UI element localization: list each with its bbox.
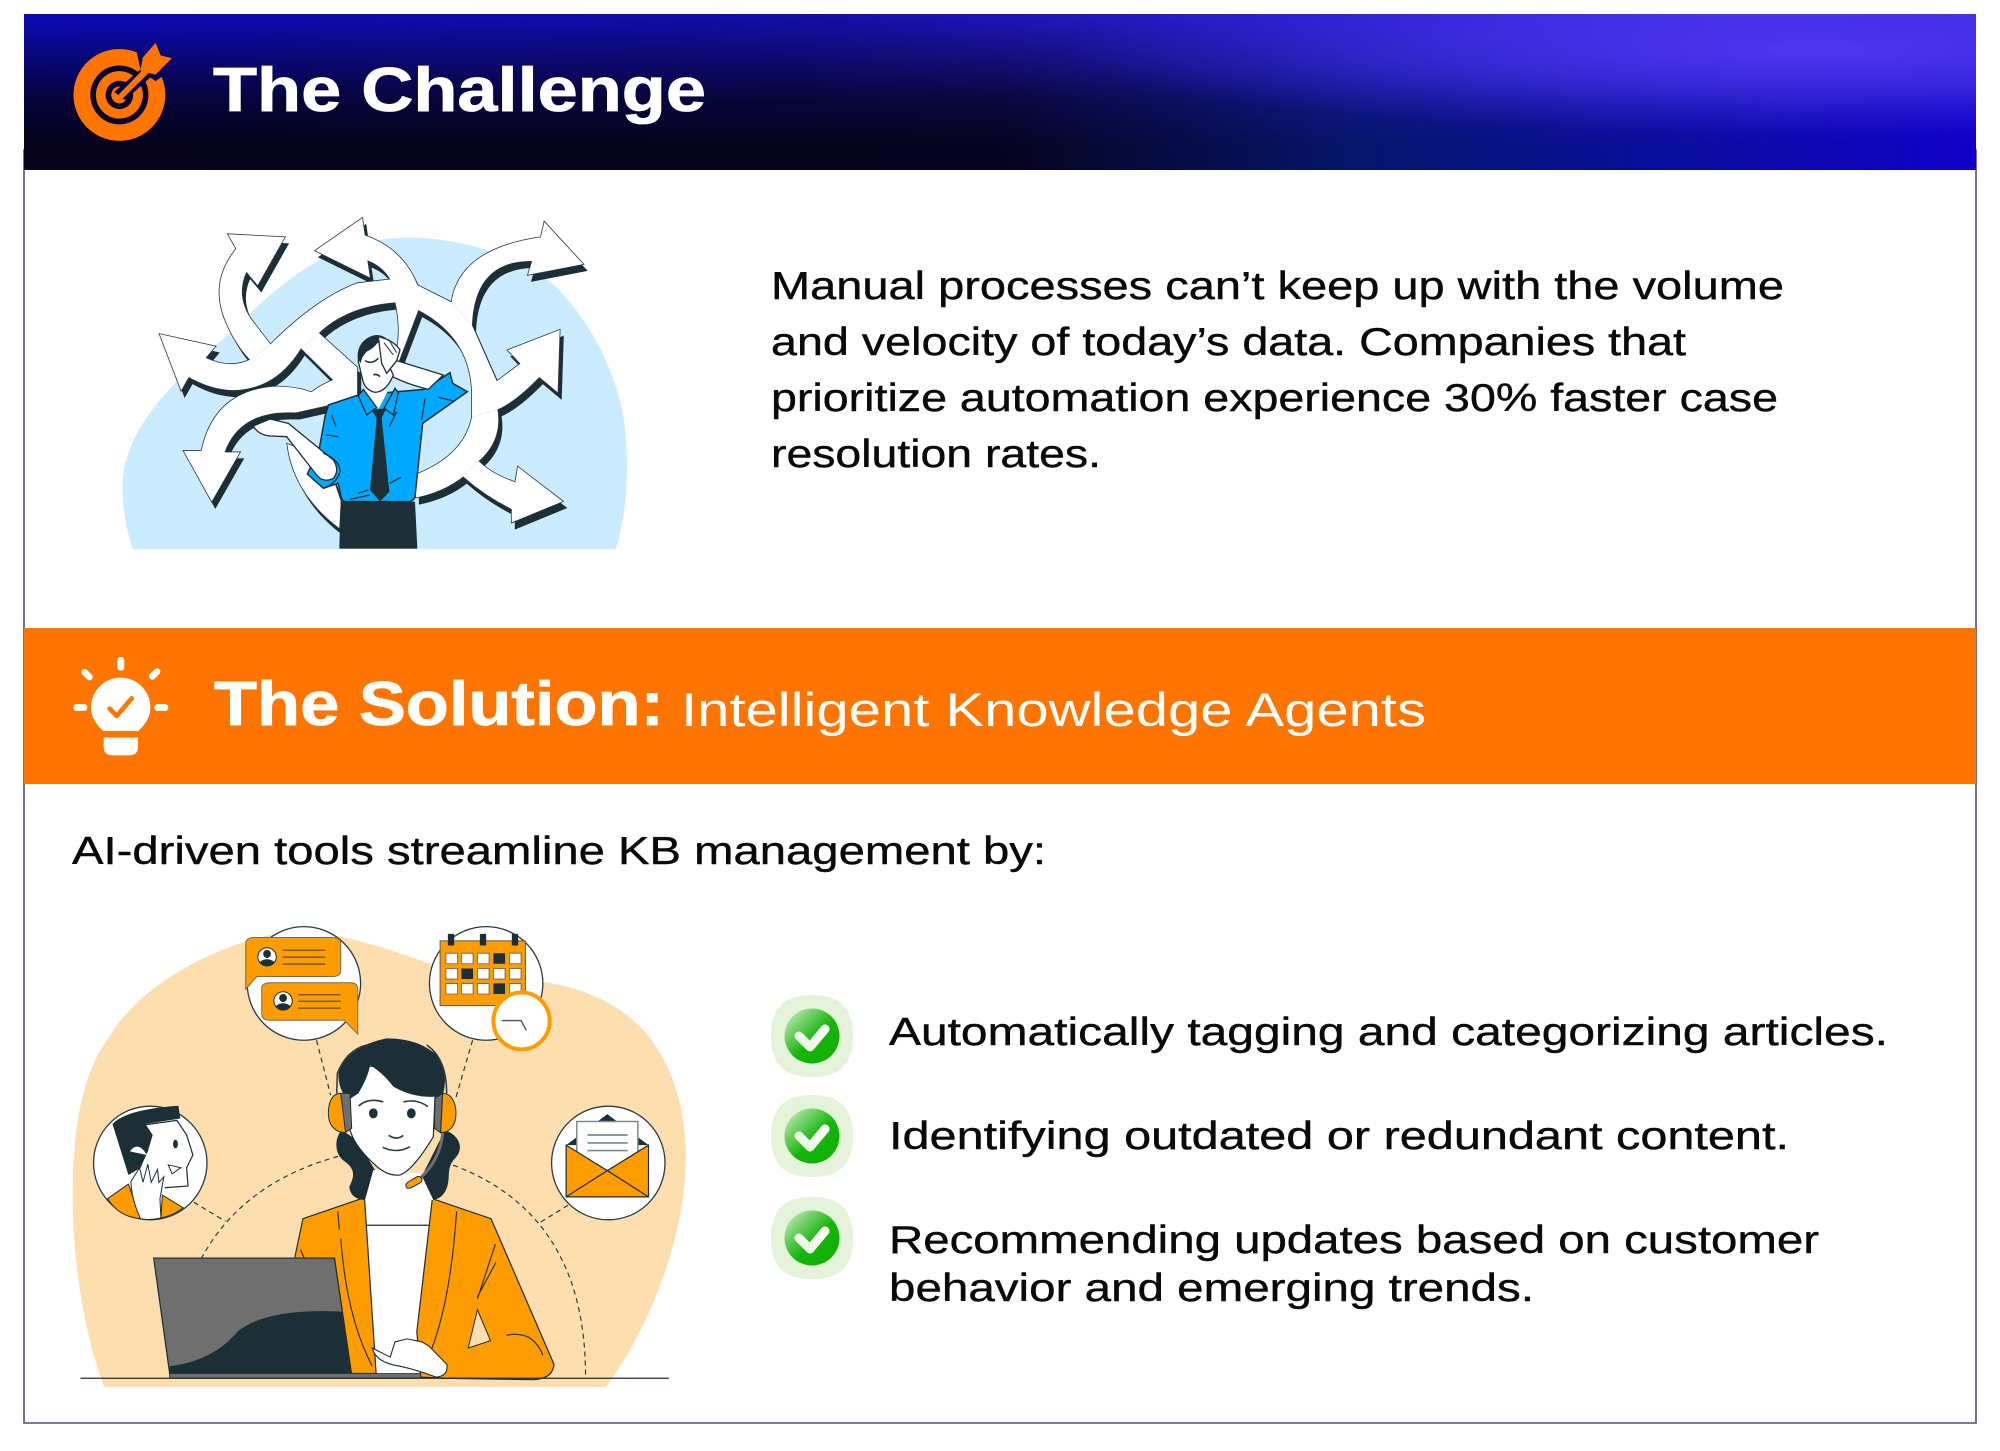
neck [365, 1170, 433, 1200]
neck [365, 388, 388, 408]
text block: challenge description: prioritize automation experience 30% faster case [771, 377, 1778, 420]
caller circle [94, 1106, 207, 1220]
list item 1 [771, 995, 1888, 1077]
hair [358, 335, 387, 363]
text block: challenge description: Manual processes can’t keep up with the volume [771, 265, 1784, 308]
icon: green check [771, 1095, 853, 1177]
left arm and hand [253, 419, 337, 480]
agent hands [372, 1339, 447, 1377]
ear cups [340, 1093, 443, 1133]
icon: green check [771, 1197, 853, 1279]
shirt creases [327, 397, 453, 499]
chat circle [246, 927, 361, 1040]
tie [370, 408, 389, 502]
peach blob [73, 929, 686, 1387]
brows, nose and smile [359, 1100, 428, 1151]
agent jacket and shirt [295, 1198, 554, 1380]
arrow shadow [163, 225, 587, 535]
face [350, 1063, 435, 1175]
headband [337, 1045, 447, 1093]
text: behavior and emerging trends. [889, 1267, 1534, 1310]
calendar circle [429, 927, 550, 1049]
envelope circle [552, 1106, 665, 1220]
face details [365, 358, 380, 377]
panel: solution header band [24, 628, 1976, 784]
light blue blob [122, 238, 627, 549]
man figure [253, 335, 467, 549]
text: Recommending updates based on customer [889, 1219, 1819, 1262]
text [889, 1219, 1819, 1310]
text block: challenge description: resolution rates. [771, 433, 1101, 476]
subheading: Intelligent Knowledge Agents: Intelligent Knowledge Agents [681, 683, 1426, 736]
microphone [420, 1133, 443, 1178]
heading: The Solution: The Solution: [214, 670, 664, 739]
title: The Challenge: The Challenge [213, 56, 706, 125]
laptop [154, 1258, 421, 1378]
eyes [369, 1108, 378, 1118]
icon: light bulb with check [73, 657, 168, 755]
icon: green check [771, 995, 853, 1077]
head [358, 342, 393, 392]
list item 3 [771, 1197, 1819, 1310]
shirt [307, 373, 467, 502]
dashed connectors [194, 1040, 586, 1378]
arrow fill [160, 218, 583, 528]
collar [358, 388, 398, 415]
illustration: confused man with arrows [122, 218, 627, 549]
list item 2 [771, 1095, 1789, 1177]
text: solution intro: AI-driven tools streamline KB management by: [72, 830, 1046, 873]
text block: challenge description: and velocity of today’s data. Companies that [771, 321, 1686, 364]
text: Identifying outdated or redundant content. [889, 1115, 1789, 1158]
lower hair [336, 1130, 460, 1200]
hand on head [378, 337, 400, 373]
arrow outline [160, 218, 583, 528]
text block: challenge description [771, 265, 1784, 476]
text: Automatically tagging and categorizing articles. [889, 1011, 1888, 1054]
icon: target with arrow [73, 43, 172, 141]
right arm [387, 361, 443, 389]
panel: challenge header band [24, 14, 1976, 170]
illustration: support agent at laptop [73, 927, 686, 1387]
agent head with headset [328, 1038, 460, 1200]
top hair [338, 1038, 445, 1100]
trousers [339, 502, 417, 549]
desk line [80, 1377, 669, 1379]
